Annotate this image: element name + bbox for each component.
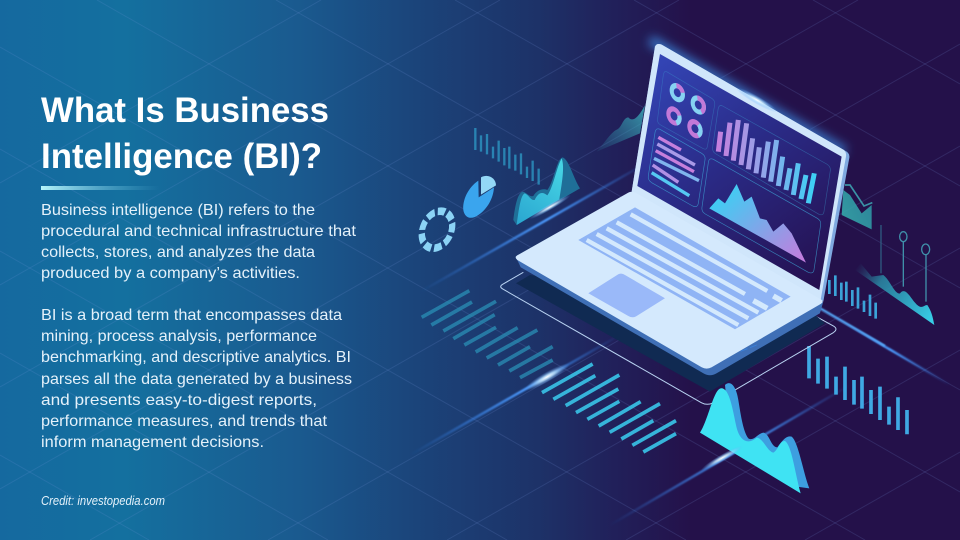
paragraph: scope: performance measures, and trends that xyxy=(41,413,328,430)
paragraph: scope: and presents easy-to-digest reports, xyxy=(41,392,317,409)
paragraph: scope: inform management decisions. xyxy=(41,434,264,451)
title: What Is Business xyxy=(41,91,329,130)
title: Intelligence (BI)? xyxy=(41,137,322,176)
paragraph: definition xyxy=(41,202,357,282)
paragraph: scope: mining, process analysis, performance xyxy=(41,328,317,345)
laptop base side xyxy=(516,257,823,375)
keyboard xyxy=(578,207,791,329)
bar chart: lower right xyxy=(809,346,907,434)
small bar chart: right of laptop xyxy=(829,275,876,319)
laptop indicator xyxy=(741,344,759,351)
paragraph: definition: procedural and technical infrastructure that xyxy=(41,223,357,240)
paragraph: definition: collects, stores, and analyzes the data xyxy=(41,244,315,261)
icon: pie chart xyxy=(463,176,496,218)
title xyxy=(41,91,329,176)
paragraph: scope: benchmarking, and descriptive analytics. BI xyxy=(41,349,351,366)
paragraph: definition: Business intelligence (BI) refers to the xyxy=(41,202,315,219)
isometric bar chart: lower left xyxy=(422,291,676,452)
area chart: behind laptop right xyxy=(842,185,872,229)
area chart: left of laptop xyxy=(513,157,580,225)
paragraph: scope: parses all the data generated by a business xyxy=(41,371,352,388)
area chart: large cyan, bottom xyxy=(700,383,809,493)
paragraph: definition: produced by a company’s activities. xyxy=(41,265,300,282)
laptop screen bezel xyxy=(632,44,849,302)
touchpad xyxy=(588,274,665,317)
small bar chart: upper left xyxy=(475,128,539,185)
paragraph: scope xyxy=(41,307,352,451)
donut charts xyxy=(665,81,707,142)
area and pin chart: right xyxy=(855,225,934,325)
area chart: behind laptop left xyxy=(597,105,645,152)
credit: Credit: investopedia.com xyxy=(41,493,165,508)
screen bar chart xyxy=(718,120,814,203)
light flares xyxy=(522,85,780,473)
screen area chart xyxy=(709,184,806,263)
laptop base top xyxy=(516,192,823,369)
screen list bars xyxy=(652,137,699,196)
laptop screen xyxy=(637,54,842,290)
icon: segmented ring xyxy=(416,206,458,253)
laptop shadow xyxy=(516,275,825,392)
glow streaks xyxy=(410,161,950,525)
screen panel outlines xyxy=(648,71,830,273)
title rule xyxy=(41,186,160,190)
laptop xyxy=(501,44,849,404)
laptop top edge glow xyxy=(650,40,845,152)
laptop shadow platform outline xyxy=(501,272,836,404)
paragraph: scope: BI is a broad term that encompasses data xyxy=(41,307,342,324)
